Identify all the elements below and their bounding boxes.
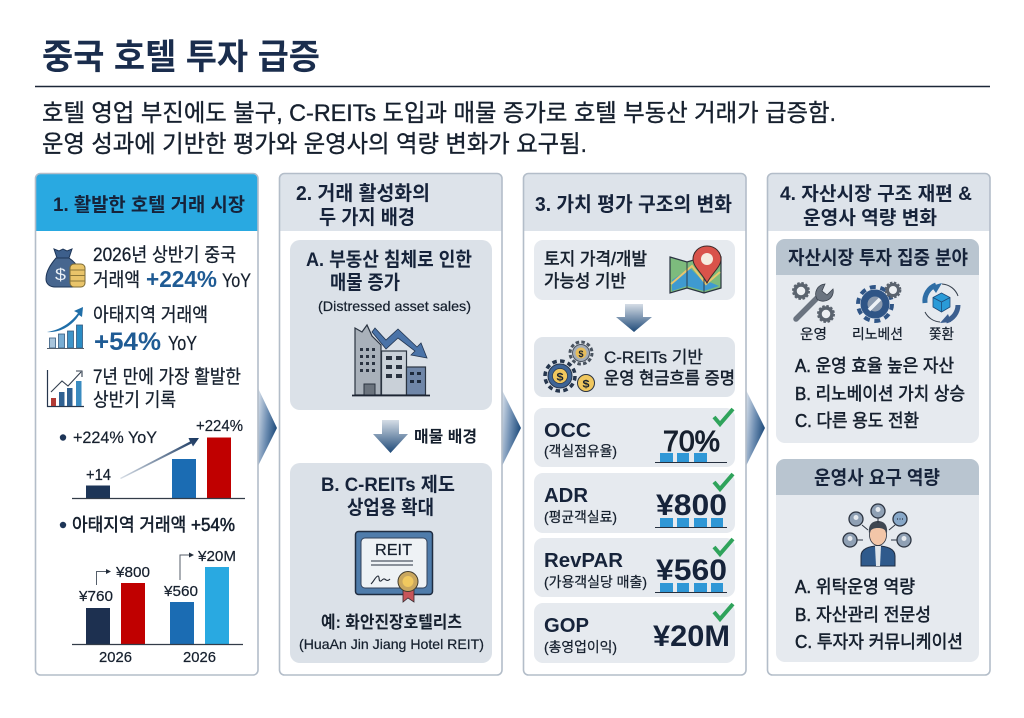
box: land price basis	[534, 240, 735, 300]
list: asset focus items: C. 다른 용도 전환	[795, 411, 919, 431]
box B: C-REITs system: 예: 화안진장호텔리츠	[321, 613, 462, 632]
arrow: panel 2 to 3	[502, 390, 521, 466]
stat: most active first half in 7 years	[93, 366, 241, 411]
metric: GOP: (총영업이익)	[544, 639, 617, 655]
stat: Asia-Pacific	[93, 304, 208, 356]
icon: check	[714, 604, 733, 619]
icon: line and bar chart	[48, 370, 84, 406]
arrow: A down to B	[373, 420, 408, 453]
metric: OCC	[534, 408, 735, 467]
summary text: 운영 성과에 기반한 평가와 운영사의 역량 변화가 요구됨.	[42, 131, 587, 158]
stat: 2026 first half China: 거래액	[93, 269, 140, 291]
stat: Asia-Pacific: YoY	[168, 333, 197, 355]
metric: ADR: (평균객실료)	[544, 509, 617, 525]
metric: ADR: ¥800	[656, 489, 727, 522]
panel 2 heading: 두 가지 배경	[319, 206, 415, 229]
list: asset focus items: B. 리노베이션 가치 상승	[795, 384, 965, 404]
box: C-REITs cash flow proof	[534, 337, 735, 397]
icon: renovation gear	[858, 282, 900, 321]
icon: gears and coins: $	[582, 378, 590, 390]
metric: RevPAR: (가용객실당 매출)	[544, 574, 647, 590]
icon: rising bars with arrow	[47, 307, 84, 348]
label: operation: 운영	[800, 326, 827, 342]
box B: C-REITs system	[290, 463, 492, 663]
panel 3 heading: 3. 가치 평가 구조의 변화	[535, 193, 732, 216]
box A: distressed asset sales: 매물 증가	[330, 272, 400, 294]
panel 4 heading	[780, 183, 972, 229]
arrow label: 매물 배경	[414, 428, 477, 446]
metric: GOP: GOP	[544, 614, 589, 637]
box: operator required capabilities	[776, 459, 979, 662]
icon: money bag and coins: $	[55, 265, 67, 284]
icon: money bag and coins	[46, 249, 85, 287]
bar chart: Asia-Pacific +54%: ¥760	[78, 588, 113, 605]
box: land price basis: 가능성 기반	[544, 271, 626, 291]
panel 3: valuation structure change	[524, 174, 746, 675]
icon: REIT certificate: REIT	[375, 542, 412, 559]
title: 중국 호텔 투자 급증	[42, 38, 320, 77]
stat: most active first half in 7 years: 7년 만에 가장 활발한	[93, 366, 241, 388]
arrow: land basis to cash flow basis	[616, 304, 652, 332]
panel 4 heading: 운영사 역량 변화	[803, 207, 937, 229]
icon: gears and coins: $	[578, 349, 584, 359]
panel 4 heading: 4. 자산시장 구조 재편 &	[780, 183, 972, 205]
icon: manager with network	[843, 504, 911, 566]
stat: Asia-Pacific: +54%	[94, 328, 161, 356]
summary text	[42, 100, 836, 158]
bar chart: +224% YoY: +224% YoY	[73, 429, 157, 447]
icon: declining buildings	[352, 325, 430, 396]
metric: RevPAR	[534, 538, 735, 597]
bar chart: +224% YoY: +14	[86, 467, 111, 484]
list: asset focus items	[795, 356, 965, 431]
metric: GOP	[534, 603, 735, 663]
stat: most active first half in 7 years: 상반기 기록	[93, 389, 176, 411]
bar chart: Asia-Pacific +54%	[60, 515, 243, 666]
icon: check	[714, 474, 733, 489]
stat: 2026 first half China: +224%	[146, 266, 217, 292]
bar chart: +224% YoY: +224%	[196, 418, 243, 435]
box B: C-REITs system: B. C-REITs 제도	[321, 474, 455, 496]
arrow: panel 1 to 2	[258, 388, 277, 466]
panel 4: asset market restructuring and operator capability	[768, 174, 990, 675]
bar chart: Asia-Pacific +54%: ¥800	[115, 564, 150, 581]
list: operator capabilities: B. 자산관리 전문성	[795, 605, 931, 625]
bar chart: Asia-Pacific +54%: ¥560	[163, 583, 198, 600]
box B: C-REITs system: 상업용 확대	[347, 497, 434, 519]
bar chart: Asia-Pacific +54%: ¥20M	[197, 548, 236, 565]
metric: ADR	[534, 473, 735, 533]
stat: 2026 first half China: YoY	[222, 271, 251, 292]
box: C-REITs cash flow proof: 운영 현금흐름 증명	[604, 369, 735, 388]
stat: Asia-Pacific: 아태지역 거래액	[93, 304, 208, 326]
icon: map pin	[670, 246, 721, 293]
metric: OCC: 70%	[663, 426, 720, 458]
icon: check	[714, 409, 733, 424]
panel 1: active hotel transaction market	[36, 174, 258, 675]
list: operator capabilities: A. 위탁운영 역량	[795, 577, 915, 597]
list: asset focus items: A. 운영 효율 높은 자산	[795, 356, 954, 376]
bar chart: Asia-Pacific +54%: 2026	[99, 649, 132, 666]
metric: OCC: OCC	[544, 419, 591, 442]
icon: gears and coins: $	[556, 372, 564, 384]
metric: RevPAR: RevPAR	[544, 549, 623, 572]
box: land price basis: 토지 가격/개발	[544, 249, 647, 269]
icon: gears and coins	[545, 342, 594, 392]
label: conversion: 쫓환	[929, 326, 954, 342]
bar chart: Asia-Pacific +54%: 아태지역 거래액 +54%	[72, 515, 235, 535]
stat: 2026 first half China	[93, 244, 251, 292]
box: asset market investment focus: 자산시장 투자 집중 분야	[788, 247, 968, 269]
metric: OCC: (객실점유율)	[544, 443, 617, 459]
summary text: 호텔 영업 부진에도 불구, C-REITs 도입과 매물 증가로 호텔 부동산 거래가 급증함.	[42, 100, 836, 127]
box A: distressed asset sales: (Distressed asset sales)	[318, 298, 471, 314]
panel 1 heading: 1. 활발한 호텔 거래 시장	[53, 194, 245, 216]
icon: wrench and gears	[793, 283, 834, 322]
panel 2 heading: 2. 거래 활성화의	[296, 182, 430, 205]
icon: check	[714, 539, 733, 554]
icon: conversion cycle	[925, 283, 958, 323]
list: operator capabilities	[795, 577, 963, 652]
stat: 2026 first half China: 2026년 상반기 중국	[93, 244, 236, 266]
bar chart: Asia-Pacific +54%: 2026	[183, 649, 216, 666]
panel 2: two background factors	[280, 174, 502, 675]
box A: distressed asset sales: A. 부동산 침체로 인한	[306, 249, 472, 271]
box: C-REITs cash flow proof: C-REITs 기반	[604, 348, 703, 367]
arrow: panel 3 to 4	[746, 390, 765, 466]
metric: RevPAR: ¥560	[656, 554, 727, 587]
box: operator required capabilities: 운영사 요구 역량	[814, 467, 940, 489]
bar chart: +224% YoY	[60, 418, 245, 498]
panel 2 heading	[296, 182, 430, 229]
metric: ADR: ADR	[544, 484, 588, 507]
box: asset market investment focus	[776, 239, 979, 443]
box A: distressed asset sales	[290, 240, 492, 410]
label: renovation: 리노베션	[852, 326, 903, 342]
list: operator capabilities: C. 투자자 커뮤니케이션	[795, 632, 963, 652]
icon: REIT certificate	[356, 532, 432, 602]
box B: C-REITs system: (HuaAn Jin Jiang Hotel REIT)	[299, 636, 484, 652]
metric: GOP: ¥20M	[653, 620, 730, 653]
